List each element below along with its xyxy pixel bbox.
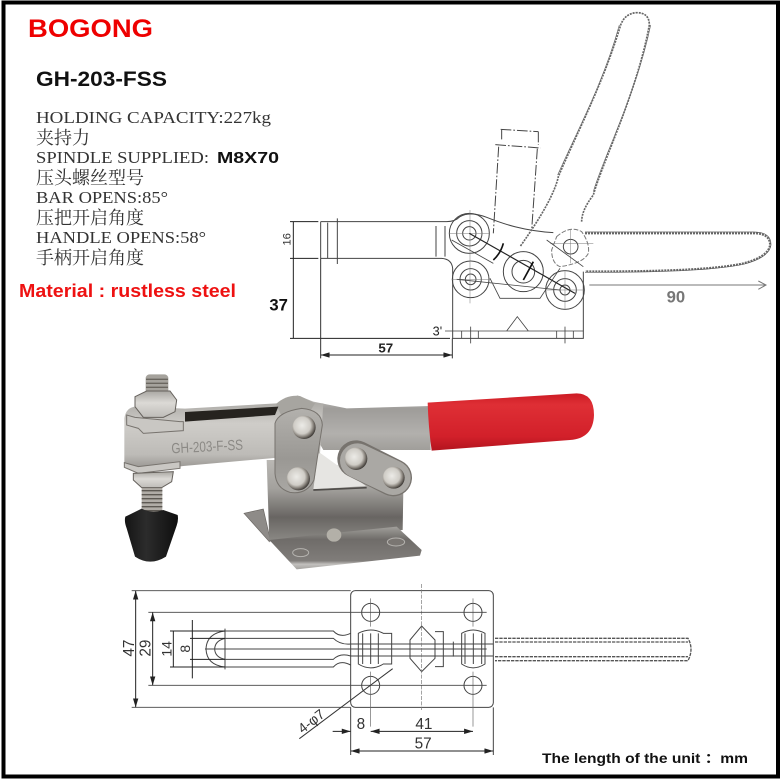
dimension 14 xyxy=(158,631,225,667)
specifications text block: 压把开启角度 xyxy=(36,208,144,228)
clamping arm xyxy=(124,403,323,472)
dimension 37: 37 xyxy=(269,296,288,315)
rear base flange xyxy=(244,509,270,542)
dimension 29 xyxy=(138,612,155,685)
rivets xyxy=(287,416,405,490)
hole centre lines xyxy=(132,591,487,707)
dimension 37 xyxy=(269,258,450,338)
dimension 3: 3' xyxy=(433,324,442,338)
closed clamp outline xyxy=(321,214,583,338)
specifications text block: HANDLE OPENS:58° xyxy=(36,228,206,247)
arm stamped model text: GH-203-F-SS xyxy=(171,438,244,457)
dimension 57: 57 xyxy=(415,735,432,752)
specifications text block: BAR OPENS:85° xyxy=(36,188,168,207)
linkage xyxy=(358,626,485,672)
upright base plate xyxy=(267,460,403,542)
mounting holes xyxy=(362,598,482,727)
specifications text block: 手柄开启角度 xyxy=(36,248,144,268)
dimension 14: 14 xyxy=(158,641,174,657)
dimension 16 xyxy=(282,222,318,258)
handle bar xyxy=(297,395,431,450)
opened bar in phantom lines xyxy=(493,129,541,233)
specifications text block xyxy=(36,108,279,268)
brand logo: BOGONG xyxy=(28,15,153,43)
dimension 90 arrow xyxy=(589,281,766,307)
mounting holes xyxy=(293,538,405,557)
dimension 90 arrow: 90 xyxy=(667,288,685,307)
dimension 57: 57 xyxy=(378,341,393,356)
dimension 8 xyxy=(177,620,225,678)
dimensions 8 and 41: 8 xyxy=(357,716,365,733)
model number: GH-203-FSS xyxy=(36,68,167,91)
left link plate xyxy=(275,408,322,493)
specifications text block: SPINDLE SUPPLIED: xyxy=(36,148,209,167)
arm outline xyxy=(205,629,493,669)
material callout: Material : rustless steel xyxy=(19,280,236,301)
dimension 29: 29 xyxy=(138,640,155,657)
dimensions 8 and 41: 41 xyxy=(415,716,432,733)
hole diameter callout xyxy=(295,669,393,739)
pivot circles xyxy=(449,210,593,310)
handle xyxy=(495,638,691,661)
red handle grip xyxy=(428,393,594,451)
base stamped bump xyxy=(327,528,341,542)
pivot hub xyxy=(276,396,315,420)
side view technical drawing xyxy=(269,13,771,358)
top view technical drawing xyxy=(121,584,691,755)
specifications text block: HOLDING CAPACITY:227kg xyxy=(36,108,271,127)
dimension 16: 16 xyxy=(282,233,294,246)
dimensions 8 and 41 xyxy=(333,707,493,755)
dimension 47: 47 xyxy=(121,640,138,657)
rubber tip xyxy=(125,509,178,562)
arm slot xyxy=(185,407,278,422)
specifications text block: 夹持力 xyxy=(36,128,90,148)
hex nuts xyxy=(133,391,177,488)
upper and lower washers xyxy=(124,415,183,473)
window lower edge xyxy=(313,488,367,490)
base window xyxy=(313,452,366,489)
specifications text block: 压头螺丝型号 xyxy=(36,168,144,188)
base plate outline xyxy=(351,591,493,707)
specifications text block: M8X70 xyxy=(217,150,279,167)
handle open position xyxy=(520,13,651,247)
threaded spindle xyxy=(142,374,168,513)
base plate xyxy=(445,317,583,343)
front base flange xyxy=(269,527,422,569)
right link plate xyxy=(356,459,393,478)
dimension 57 xyxy=(321,258,452,358)
unit note: The length of the unit ：mm xyxy=(542,751,748,766)
handle closed position xyxy=(585,232,771,272)
hole diameter callout: 4-φ7 xyxy=(295,706,328,736)
dimension 8: 8 xyxy=(177,645,193,653)
product photo of toggle clamp xyxy=(124,374,594,569)
dimension 47 xyxy=(121,591,138,707)
